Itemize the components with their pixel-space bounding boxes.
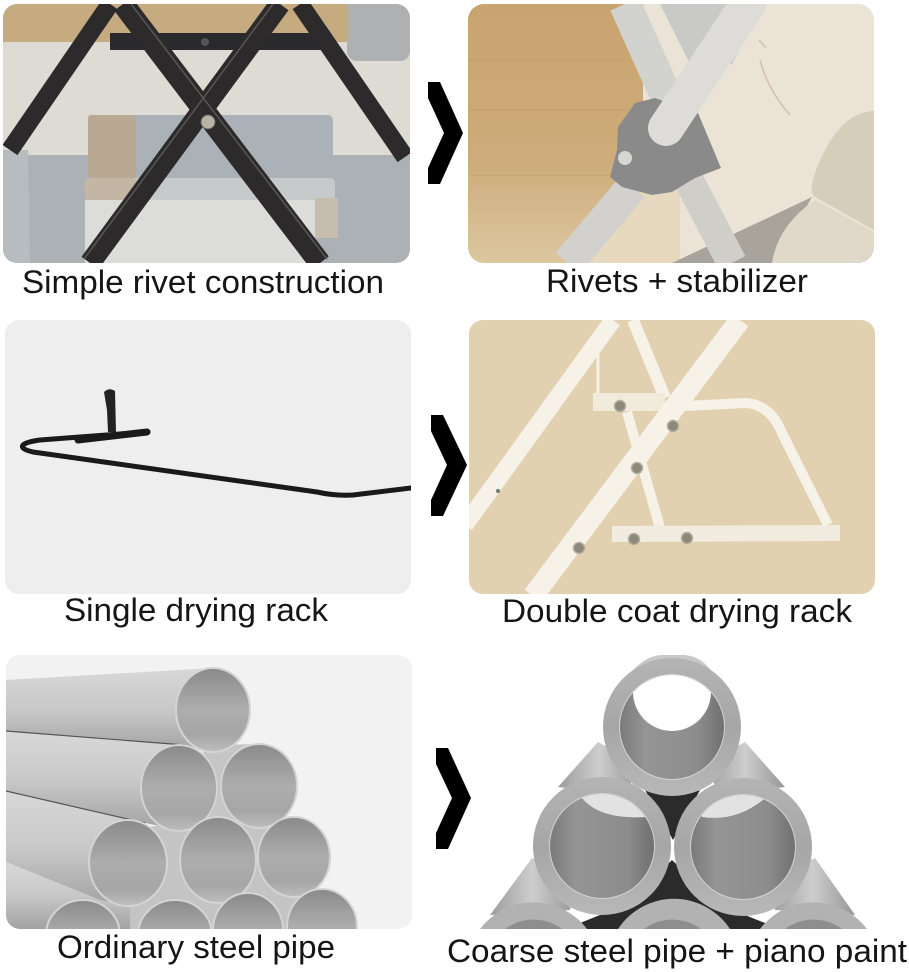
top pipe	[603, 653, 741, 796]
pipe bodies	[6, 668, 300, 929]
light grey tube frame	[568, 4, 732, 263]
panel: coarse steel pipe	[480, 653, 870, 929]
icon: rivet	[201, 115, 215, 129]
beige cushions	[672, 197, 812, 263]
clip bracket	[104, 389, 116, 432]
rivets	[574, 400, 692, 554]
grey fabric	[660, 4, 738, 64]
towel stack	[85, 115, 338, 263]
arrow: row 1	[428, 82, 463, 184]
caption: simple rivet construction: Simple rivet construction	[22, 264, 384, 300]
caption: double coat drying rack: Double coat drying rack	[502, 593, 853, 629]
top bar	[110, 33, 322, 50]
arrow: row 2	[431, 415, 467, 516]
front tube	[666, 4, 748, 128]
side pipes	[558, 742, 632, 788]
panel: rivets + stabilizer	[468, 4, 874, 263]
drying rack rail	[22, 432, 411, 495]
caption: single drying rack: Single drying rack	[64, 592, 329, 628]
middle right pipe	[674, 778, 812, 916]
middle left pipe	[533, 777, 671, 915]
arrow: row 3	[436, 748, 471, 849]
bottom pipes	[480, 899, 867, 929]
grey box	[347, 0, 410, 61]
panel: double coat drying rack	[465, 320, 875, 596]
dark gaps	[645, 790, 700, 840]
caption: rivets + stabilizer: Rivets + stabilizer	[546, 263, 808, 299]
panel: ordinary steel pipe	[6, 655, 412, 929]
back of top pipe	[633, 655, 710, 670]
caption: ordinary steel pipe: Ordinary steel pipe	[57, 929, 335, 965]
black X frame	[10, 4, 405, 263]
panel: single drying rack	[5, 320, 411, 594]
panel: simple rivet construction	[3, 0, 410, 263]
caption: coarse steel pipe + piano paint: Coarse steel pipe + piano paint	[447, 933, 907, 969]
icon: stabilizer bracket	[610, 98, 721, 195]
pipe ends	[46, 667, 358, 929]
white tube frame	[465, 320, 840, 596]
